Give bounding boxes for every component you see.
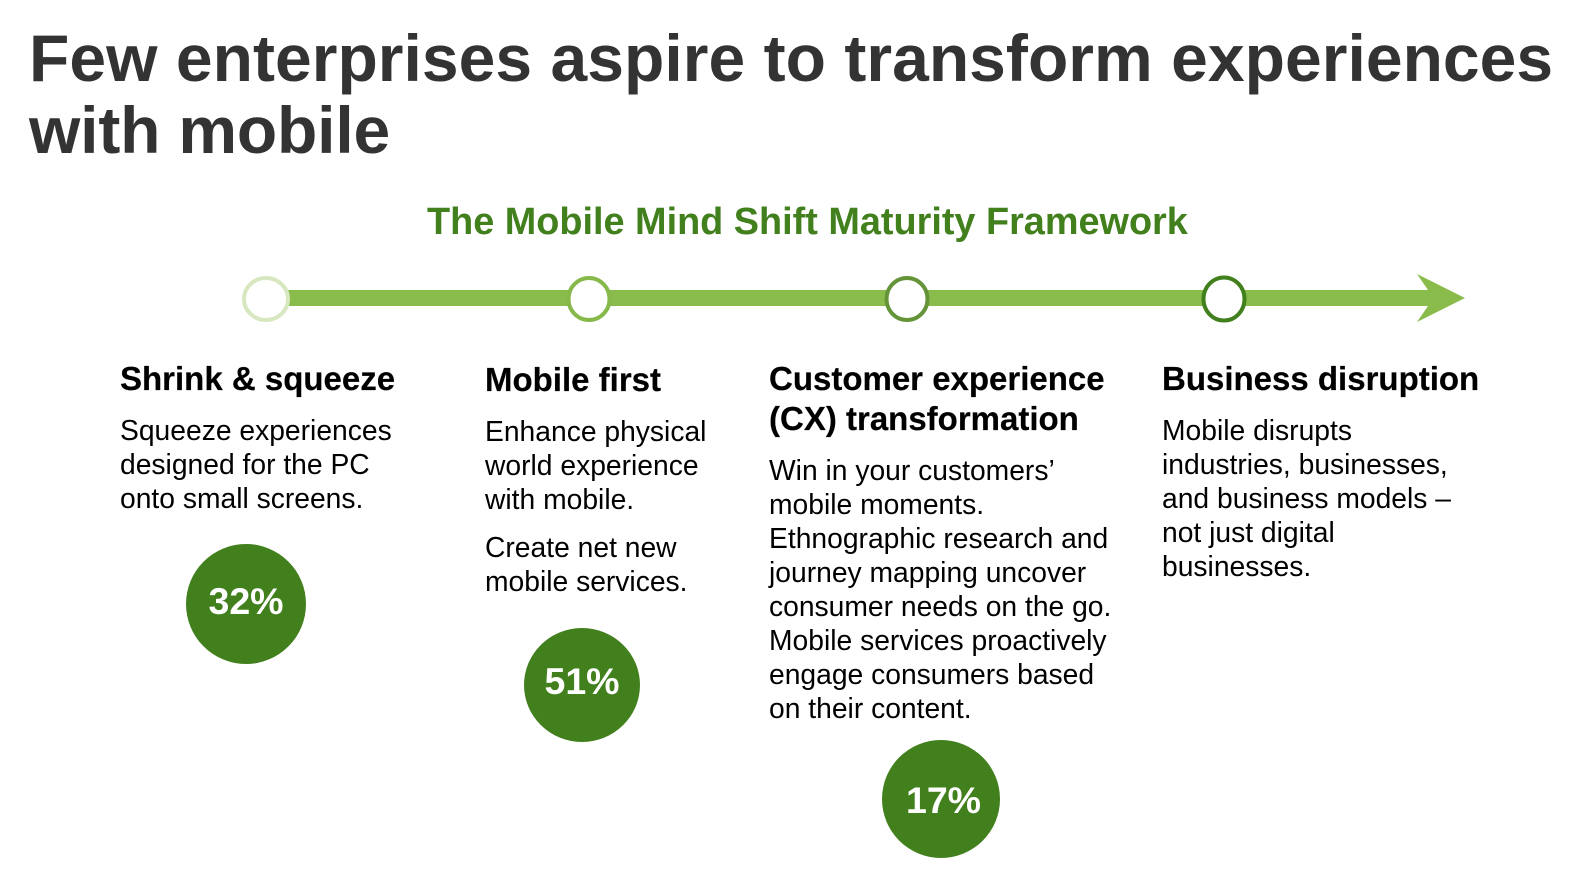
stage 1 percentage: 32% bbox=[208, 580, 284, 622]
stage 2 description: with mobile. Create net new bbox=[485, 483, 677, 563]
marker: stage 4 bbox=[1204, 278, 1244, 320]
marker: stage 1 bbox=[244, 278, 288, 320]
stage 2 description: mobile services. bbox=[485, 565, 688, 597]
stage 1 description bbox=[120, 414, 392, 514]
stage 3 description: Win in your customers’ bbox=[769, 454, 1055, 486]
stage 3 description: on their content. bbox=[769, 692, 972, 724]
stage 2 percentage: 51% bbox=[544, 660, 620, 702]
stage 3 percentage bbox=[882, 740, 1000, 858]
stage 3 description: engage consumers based bbox=[769, 658, 1094, 690]
stage 3 description: Ethnographic research and bbox=[769, 522, 1108, 554]
stage 3 description: mobile moments. bbox=[769, 488, 984, 520]
stage 2 heading: Mobile first bbox=[485, 361, 661, 398]
stage 4 description: businesses. bbox=[1162, 550, 1311, 582]
stage 3 description: consumer needs on the go. bbox=[769, 590, 1111, 622]
stage 2 percentage bbox=[524, 628, 640, 742]
title bbox=[28, 21, 1553, 167]
stage 3 heading bbox=[769, 360, 1105, 438]
stage 3 percentage: 17% bbox=[906, 778, 981, 820]
stage 4 description bbox=[1162, 414, 1451, 582]
stage 1 heading: Shrink & squeeze bbox=[120, 360, 395, 397]
stage 4 description: not just digital bbox=[1162, 516, 1335, 548]
marker: stage 2 bbox=[568, 278, 610, 320]
stage 3 description bbox=[768, 454, 1111, 724]
marker: stage 3 bbox=[886, 278, 928, 320]
arrow bbox=[270, 274, 1465, 322]
timeline arrow with stage markers bbox=[242, 274, 1465, 322]
stage 3 heading: Customer experience bbox=[769, 360, 1105, 397]
stage 1 description: designed for the PC bbox=[120, 448, 370, 480]
stage 4 description: Mobile disrupts bbox=[1162, 414, 1352, 446]
stage 3 description: journey mapping uncover bbox=[769, 556, 1086, 588]
stage 1 description: onto small screens. bbox=[120, 482, 363, 514]
stage 3 heading: (CX) transformation bbox=[769, 400, 1079, 437]
stage 1 description: Squeeze experiences bbox=[120, 414, 392, 446]
title: Few enterprises aspire to transform experiences bbox=[29, 21, 1553, 95]
title: with mobile bbox=[29, 93, 390, 167]
stage 4 description: and business models – bbox=[1162, 482, 1451, 514]
stage 2 description: world experience bbox=[485, 449, 699, 481]
stage 4 description: industries, businesses, bbox=[1162, 448, 1448, 480]
stage 4 heading: Business disruption bbox=[1162, 360, 1479, 397]
framework heading: The Mobile Mind Shift Maturity Framework bbox=[427, 201, 1188, 243]
stage 2 description bbox=[485, 415, 706, 597]
stage 2 description: Enhance physical bbox=[485, 415, 706, 447]
stage 3 description: Mobile services proactively bbox=[769, 624, 1107, 656]
stage 1 percentage bbox=[186, 544, 306, 664]
